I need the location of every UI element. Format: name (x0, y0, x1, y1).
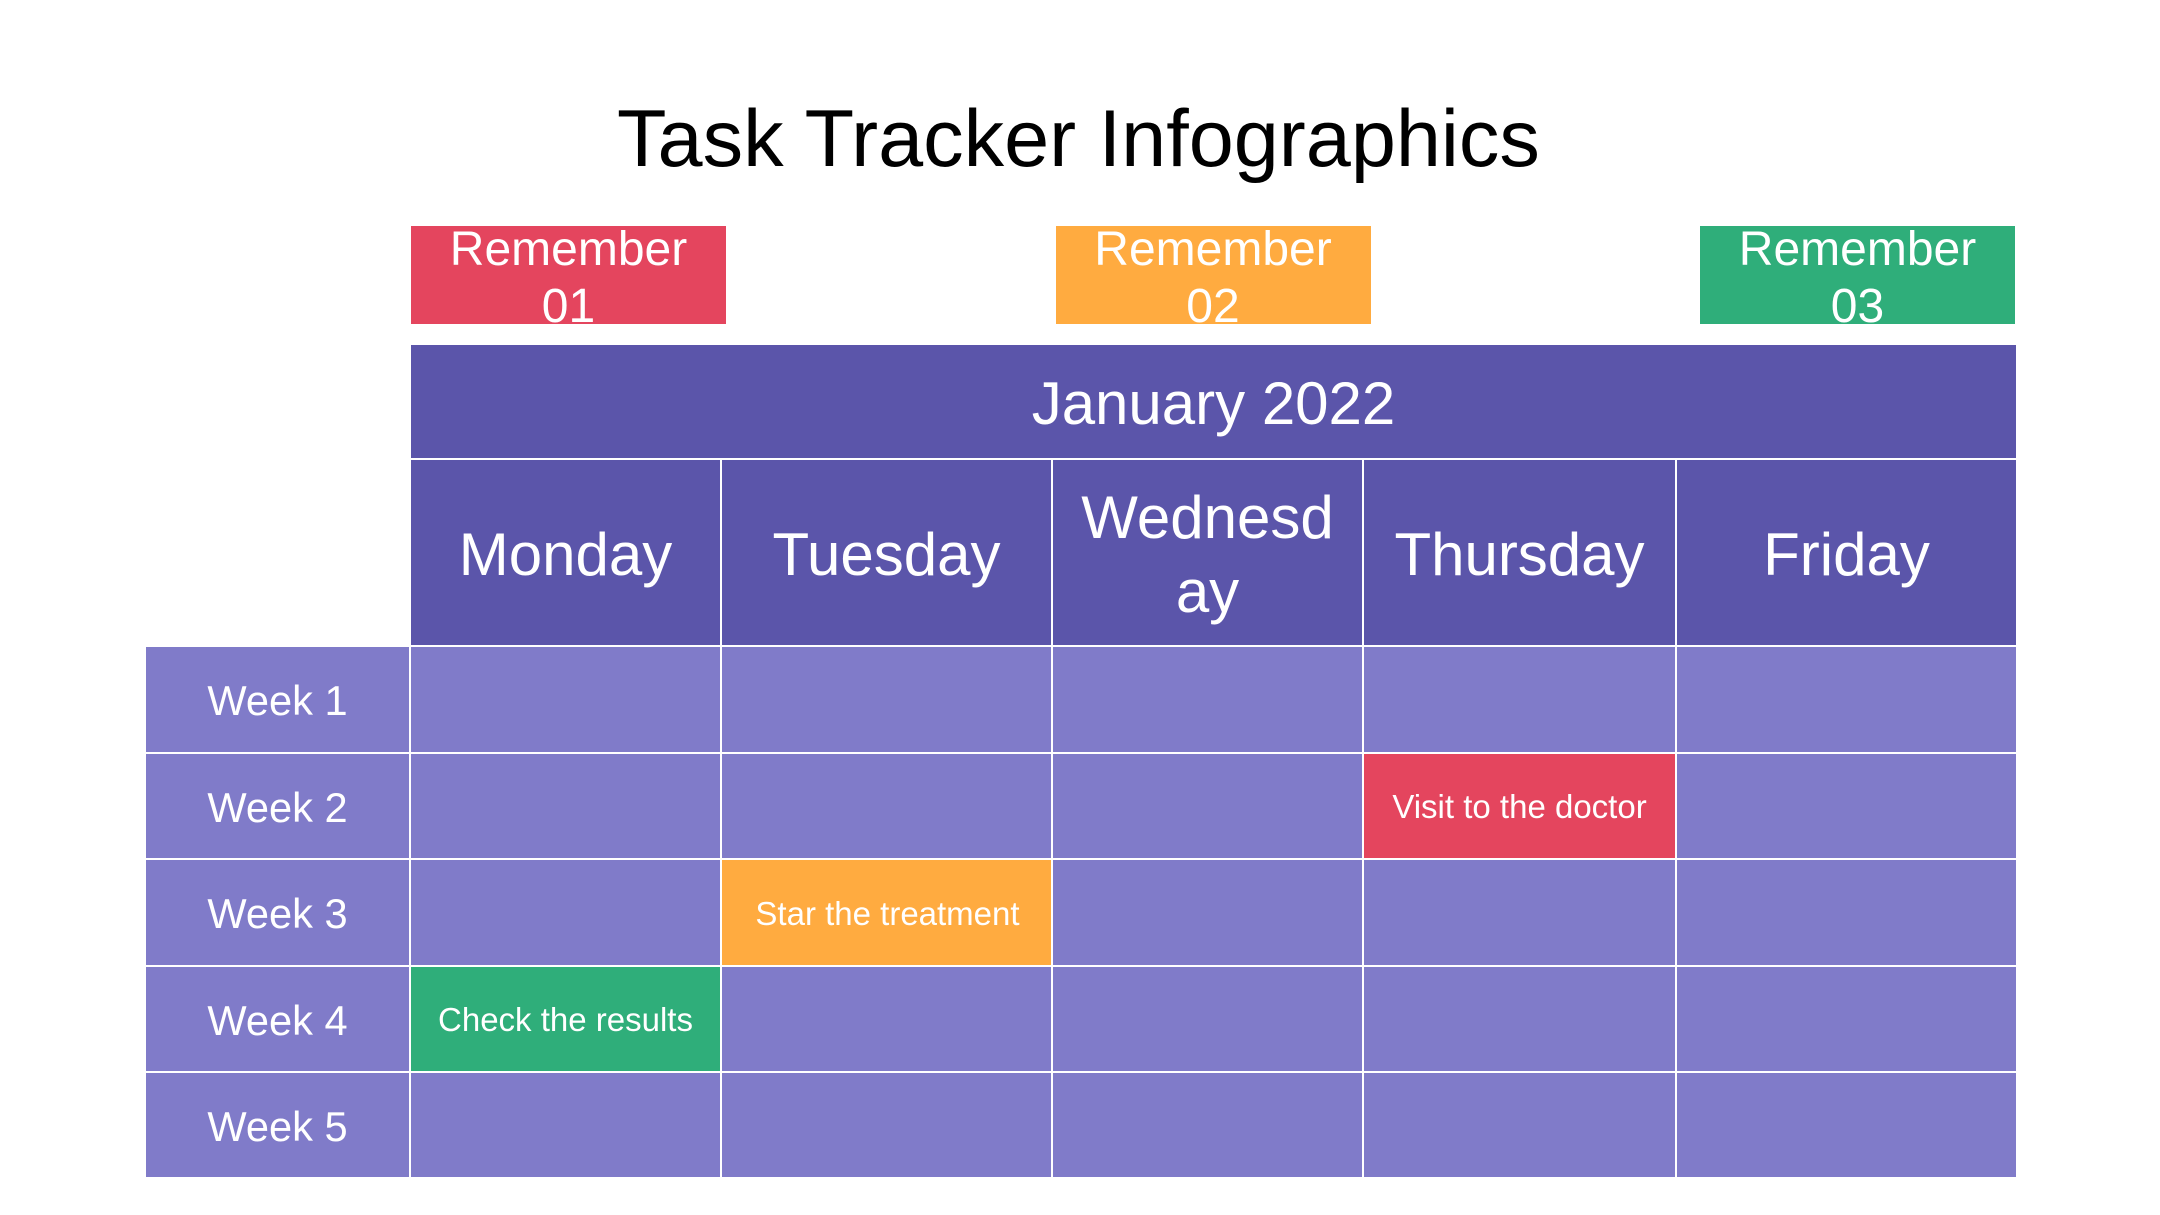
week 3 cells (411, 860, 720, 965)
row label: Week 4: Week 4 (207, 996, 348, 1044)
day header: Wednesday (1053, 460, 1362, 645)
task: Star the treatment: Star the treatment (755, 894, 1020, 932)
reminder: Remember 03 (1700, 226, 2015, 324)
reminder: Remember 01: Remember (450, 222, 687, 276)
day header: Wednesday: Wednesd (1081, 484, 1334, 550)
day header: Friday: Friday (1763, 521, 1930, 588)
task: Visit to the doctor: Visit to the doctor (1392, 788, 1647, 825)
reminder: Remember 02: Remember (1094, 222, 1332, 276)
month header: January 2022: January 2022 (1032, 370, 1395, 436)
day header: Tuesday: Tuesday (773, 521, 1000, 588)
reminder: Remember 01: 01 (542, 280, 595, 332)
reminder: Remember 02 (1056, 226, 1370, 324)
task: Check the results (411, 967, 720, 1071)
row label: Week 2: Week 2 (207, 784, 348, 830)
day header: Tuesday (722, 460, 1051, 645)
row label: Week 1 (146, 647, 409, 752)
day header: Thursday (1364, 460, 1675, 645)
task: Visit to the doctor (1364, 754, 1675, 858)
week 5 cells (411, 1073, 720, 1177)
row label: Week 2 (146, 754, 409, 858)
row label: Week 4 (146, 967, 409, 1071)
title: Task Tracker Infographics (617, 94, 1540, 184)
row label: Week 3 (146, 860, 409, 965)
day header: Thursday: Thursday (1394, 521, 1645, 588)
reminder: Remember 03: 03 (1831, 280, 1884, 332)
reminder: Remember 03: Remember (1739, 222, 1976, 276)
week 1 cells (411, 647, 720, 752)
row label: Week 3: Week 3 (207, 890, 348, 937)
task: Check the results: Check the results (438, 1001, 693, 1038)
week 2 cells (411, 754, 720, 858)
day header: Monday (411, 460, 720, 645)
task: Star the treatment (722, 860, 1051, 965)
month header: January 2022 (411, 345, 2016, 458)
reminder: Remember 02: 02 (1186, 280, 1240, 332)
day header: Wednesday: ay (1176, 558, 1239, 625)
row label: Week 1: Week 1 (207, 677, 348, 724)
row label: Week 5 (146, 1073, 409, 1177)
row label: Week 5: Week 5 (207, 1102, 348, 1150)
day header: Monday: Monday (459, 521, 672, 588)
day header: Friday (1677, 460, 2016, 645)
reminder: Remember 01 (411, 226, 726, 324)
